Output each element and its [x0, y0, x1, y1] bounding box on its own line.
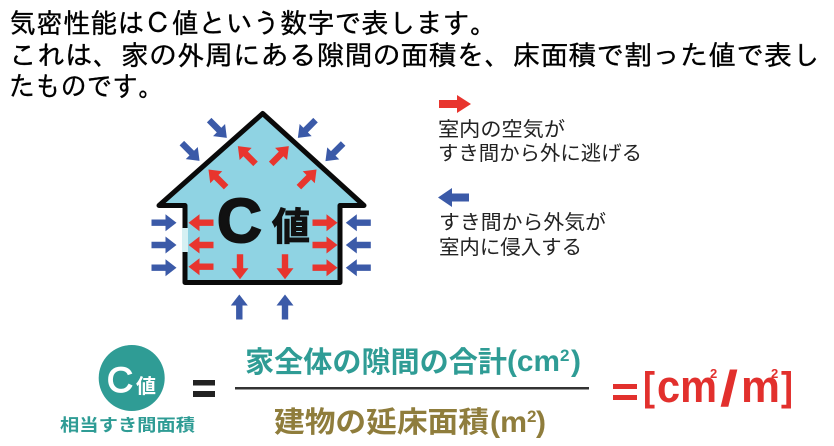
equals sign	[193, 380, 215, 397]
C value badge	[99, 345, 165, 411]
house diagram	[152, 114, 371, 320]
C value label: 値	[272, 207, 310, 249]
icon: red arrow	[439, 95, 471, 113]
legend text: air escaping: 室内の空気が	[438, 118, 565, 141]
result unit: 2	[710, 366, 717, 381]
result unit: [	[643, 365, 655, 409]
denominator: )	[536, 406, 546, 439]
icon: blue arrow	[438, 188, 469, 207]
C value label: C	[217, 187, 262, 256]
C value badge: C	[107, 361, 133, 400]
heading text: 気密性能はＣ値という数字で表します。	[9, 10, 497, 37]
result unit: /	[720, 361, 738, 417]
fraction line	[235, 387, 589, 390]
C value badge: 値	[136, 375, 156, 398]
result unit: 2	[771, 366, 778, 381]
heading text: これは、家の外周にある隙間の面積を、床面積で割った値で表し	[9, 42, 820, 69]
numerator: 2	[560, 346, 569, 365]
result unit	[613, 361, 793, 417]
denominator: (m	[490, 406, 527, 439]
result unit: ]	[781, 365, 793, 409]
house body	[159, 114, 364, 282]
legend text: outside air entering: 室内に侵入する	[439, 236, 582, 259]
badge caption: 相当すき間面積	[60, 416, 195, 435]
legend text: air escaping	[438, 118, 642, 165]
gap in left wall	[182, 228, 188, 252]
red arrows: air escaping	[188, 140, 338, 279]
formula	[60, 345, 793, 439]
heading text: たものです。	[9, 73, 164, 100]
legend text: outside air entering: すき間から外気が	[439, 211, 606, 234]
C value label	[217, 187, 310, 256]
legend text: air escaping: すき間から外に逃げる	[438, 142, 642, 165]
blue arrows: air entering	[152, 114, 371, 320]
result unit: m	[741, 361, 780, 412]
legend text: outside air entering	[439, 211, 606, 259]
legend	[438, 95, 642, 259]
heading text	[9, 10, 820, 100]
numerator: 家全体の隙間の合計	[245, 346, 507, 379]
denominator: 2	[527, 407, 536, 426]
numerator: )	[571, 345, 581, 378]
denominator: 建物の延床面積	[274, 406, 489, 439]
numerator: (cm	[507, 345, 560, 378]
result unit: cm	[657, 361, 717, 412]
